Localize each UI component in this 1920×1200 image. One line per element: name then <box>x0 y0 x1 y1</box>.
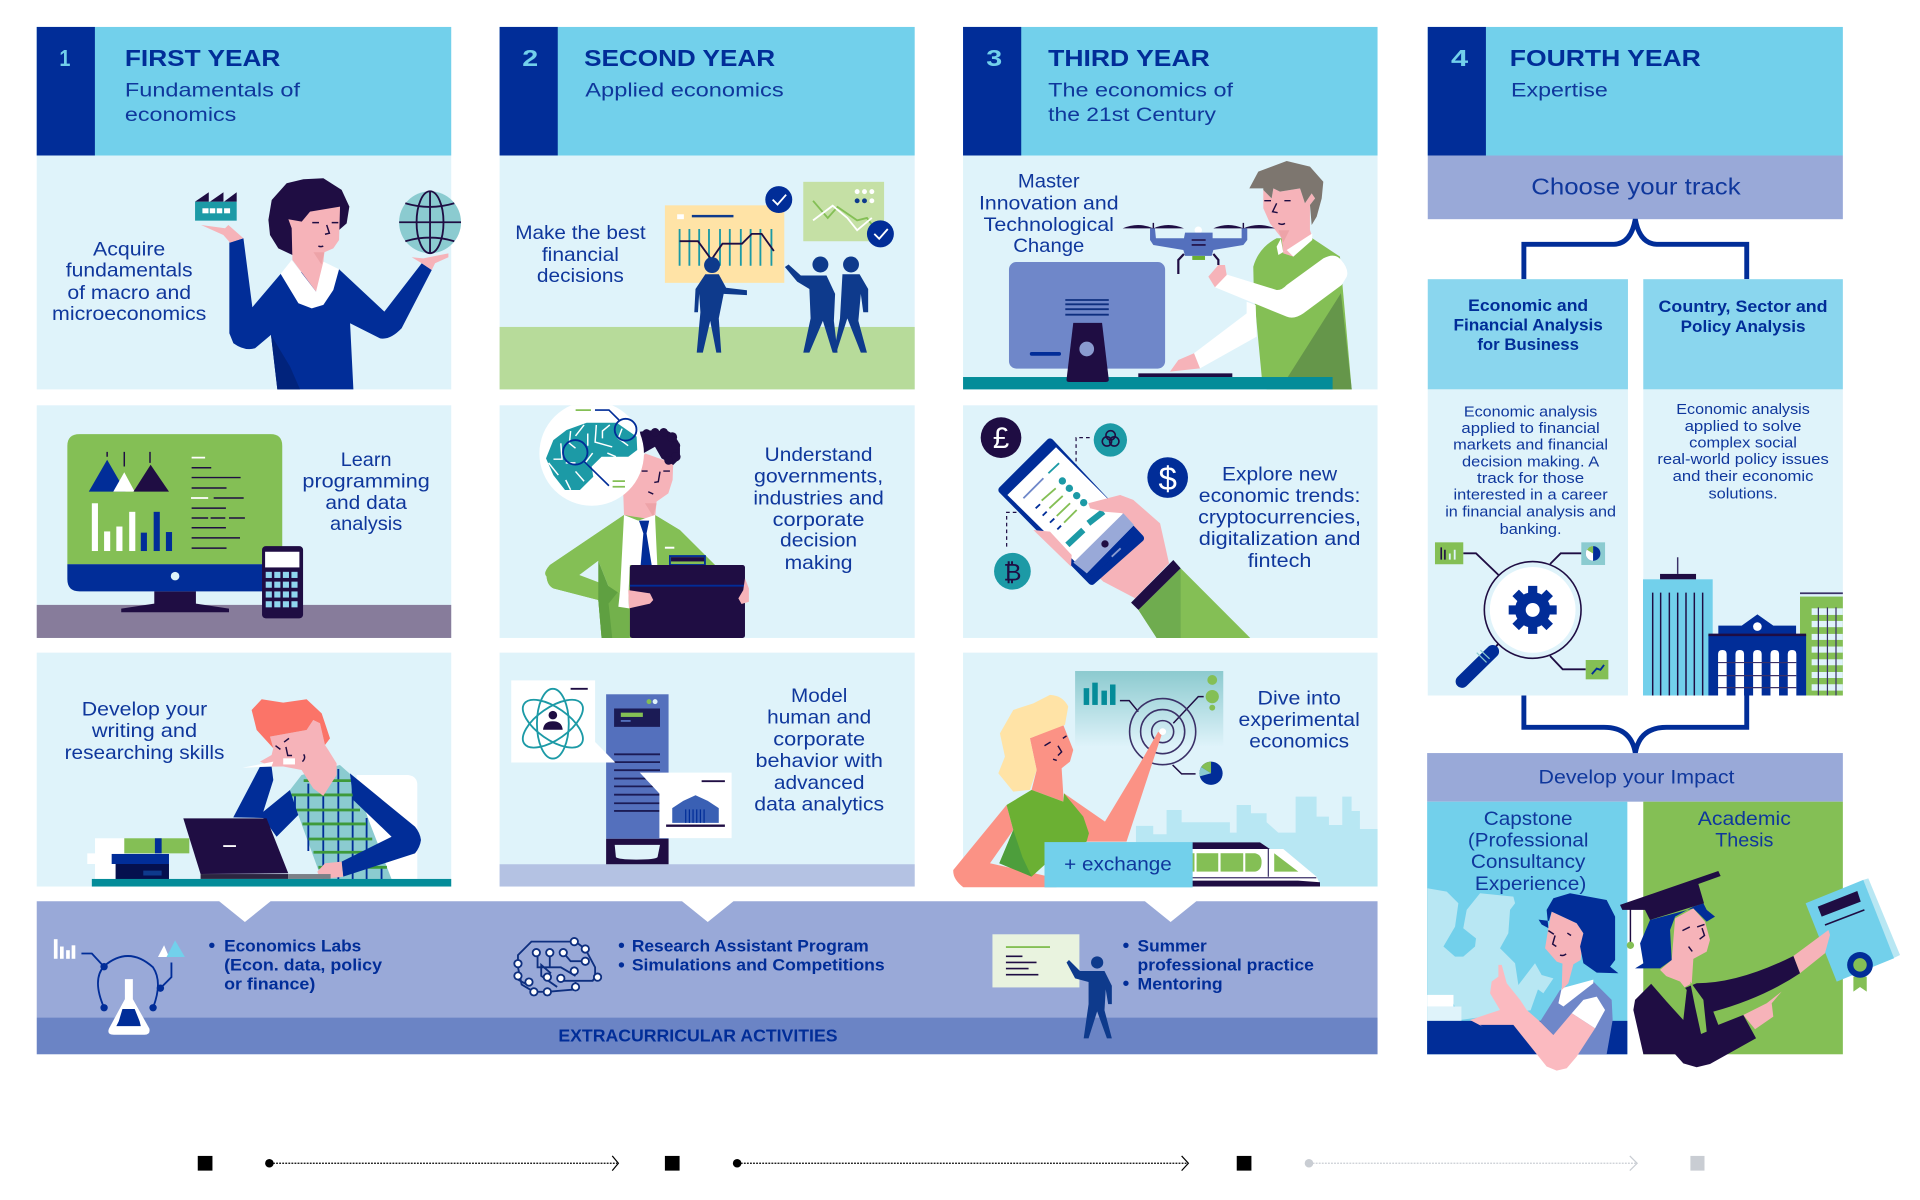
icon: chair <box>357 775 417 879</box>
choose your track <box>1428 156 1843 219</box>
header: first year: FIRST YEAR <box>125 45 281 71</box>
panel: master innovation: Technological <box>984 215 1114 236</box>
milestone square <box>665 1156 680 1171</box>
text: economics labs: Economics Labs <box>224 936 361 955</box>
panel: master innovation <box>963 156 1378 389</box>
icon: woman presenting <box>1470 893 1618 1071</box>
track card: business: Economic and <box>1468 296 1588 315</box>
track card: business: markets and financial <box>1453 437 1608 453</box>
panel: extracurricular activities: EXTRACURRICULAR ACTIVITIES <box>558 1025 838 1045</box>
panel: learn programming: and data <box>325 493 407 514</box>
panel: understand governments: corporate <box>773 510 864 531</box>
arrow: third grey dotted <box>1305 1156 1637 1171</box>
header: fourth year: FOURTH YEAR <box>1510 45 1701 71</box>
panel: understand governments: industries and <box>753 488 884 509</box>
icon: magnifier with gear <box>1435 542 1608 681</box>
panel: explore new trends: fintech <box>1248 551 1311 572</box>
panel: acquire fundamentals: of macro and <box>67 283 191 304</box>
panel: academic thesis: Thesis <box>1715 831 1773 852</box>
arrow: branching connector to tracks <box>1524 219 1747 279</box>
header: second year <box>500 27 915 156</box>
panel: understand governments <box>500 401 915 638</box>
timeline <box>198 1156 1704 1171</box>
panel: model behaviour: data analytics <box>754 795 884 816</box>
track card: policy: Policy Analysis <box>1681 317 1806 336</box>
icon: atom person bubble <box>511 680 615 762</box>
text: economics labs: or finance) <box>224 974 315 993</box>
track card: business: banking. <box>1500 522 1562 538</box>
panel: develop writing: Develop your <box>82 700 207 721</box>
icon: desktop monitor with charts <box>67 434 282 612</box>
panel: acquire fundamentals: Acquire <box>93 239 165 260</box>
track card: policy: Country, Sector and <box>1659 297 1828 316</box>
header: second year: SECOND YEAR <box>584 45 775 71</box>
panel: financial decisions: financial <box>542 245 619 266</box>
icon: city skyline <box>1136 797 1378 887</box>
panel: model behaviour <box>500 653 915 887</box>
panel: understand governments: governments, <box>754 466 883 487</box>
icon: man writing on laptop <box>233 699 421 879</box>
text: summer practice: Mentoring <box>1138 974 1223 993</box>
panel: develop writing <box>37 653 451 887</box>
panel: acquire fundamentals: fundamentals <box>66 261 193 282</box>
panel: develop writing: researching skills <box>65 743 224 764</box>
icon: presenter at board <box>992 934 1112 1038</box>
milestone square grey <box>1690 1156 1704 1171</box>
icon: bank bubble <box>640 773 732 838</box>
header: second year: 2 <box>522 45 538 71</box>
icon: target data screen <box>1075 671 1223 785</box>
header: fourth year: Expertise <box>1511 80 1608 102</box>
panel: develop writing: writing and <box>91 721 197 742</box>
panel: learn programming <box>37 405 451 638</box>
track card: business: for Business <box>1477 335 1579 354</box>
desk <box>963 377 1333 389</box>
header: first year <box>37 27 451 156</box>
icon: man with briefcase <box>545 428 749 638</box>
panel: financial decisions <box>500 156 915 389</box>
text: summer practice: professional practice <box>1138 955 1314 974</box>
text: summer practice: Summer <box>1138 936 1207 955</box>
icon: check badges <box>765 186 894 247</box>
header: fourth year: 4 <box>1451 45 1468 71</box>
text: economics labs <box>209 936 383 993</box>
track card: policy: and their economic <box>1673 469 1813 485</box>
arrow: first dotted <box>265 1156 618 1171</box>
milestone square <box>198 1156 212 1171</box>
icon: server tower <box>606 694 669 864</box>
icon: city buildings <box>1643 557 1843 696</box>
track card: business: Financial Analysis <box>1453 316 1603 335</box>
panel: academic thesis: Academic <box>1698 809 1791 830</box>
milestone square <box>1237 1156 1251 1171</box>
text: summer practice <box>1123 936 1314 993</box>
panel: extracurricular activities <box>37 901 1378 1054</box>
icon: hand holding smartphone <box>1002 442 1250 638</box>
icon: currency badges: ₿ <box>1003 559 1021 586</box>
choose your track: Choose your track <box>1531 174 1741 200</box>
icon: background silhouettes and desk <box>1427 888 1627 1054</box>
track card: policy: complex social <box>1689 436 1797 452</box>
arrow: merging connector to impact <box>1524 696 1747 753</box>
track card: policy: Economic analysis <box>1676 402 1810 418</box>
panel: model behaviour: behavior with <box>756 751 883 772</box>
track card: business: applied to financial <box>1461 421 1600 437</box>
panel: explore new trends: economic trends: <box>1199 486 1360 507</box>
panel: explore new trends: digitalization and <box>1199 529 1360 550</box>
panel: model behaviour: human and <box>767 708 871 729</box>
track card: business: Economic analysis <box>1464 404 1597 420</box>
track card: policy: applied to solve <box>1685 419 1802 435</box>
panel: model behaviour: Model <box>791 686 847 707</box>
track card: business: in financial analysis and <box>1445 505 1616 521</box>
panel: capstone: Consultancy <box>1471 852 1586 873</box>
panel: experimental economics: Dive into <box>1258 689 1341 710</box>
icon: calculator <box>262 546 303 618</box>
track card: business: track for those <box>1477 471 1584 487</box>
track card: policy: solutions. <box>1708 486 1778 502</box>
panel: understand governments: decision <box>780 531 857 552</box>
icon: currency badges <box>981 417 1188 590</box>
icon: woman pointing at target <box>953 695 1166 887</box>
label: plus exchange: + exchange <box>1064 855 1172 876</box>
panel: capstone <box>1427 802 1627 1071</box>
panel: capstone: Experience) <box>1475 874 1586 895</box>
panel: experimental economics <box>953 653 1378 887</box>
header: third year: 3 <box>986 45 1002 71</box>
header: first year: 1 <box>59 45 70 71</box>
panel: explore new trends <box>963 405 1378 638</box>
track card: business: decision making. A <box>1462 455 1600 471</box>
icon: three silhouettes <box>694 257 868 353</box>
text: research <box>619 936 885 974</box>
panel: learn programming: programming <box>302 471 430 492</box>
icon: lab flask <box>54 939 185 1035</box>
panel: understand governments: Understand <box>765 445 872 466</box>
track card: business <box>1428 279 1628 696</box>
icon: currency badges: £ <box>993 422 1009 455</box>
arrow: second dotted <box>733 1156 1188 1171</box>
panel: financial decisions: Make the best <box>515 223 646 244</box>
icon: thought bubble with brain <box>539 401 644 506</box>
panel: financial decisions: decisions <box>537 266 624 287</box>
panel: acquire fundamentals <box>37 156 461 389</box>
icon: stack of books <box>87 838 189 880</box>
text: research: Research Assistant Program <box>632 936 869 955</box>
panel: master innovation: Change <box>1013 236 1084 257</box>
icon: diploma with seal <box>1806 878 1900 992</box>
text: research: Simulations and Competitions <box>632 955 885 974</box>
icon: woman holding factory and globe <box>195 178 461 389</box>
icon: graduate pointing <box>1620 871 1830 1067</box>
header: second year: Applied economics <box>585 80 784 102</box>
icon: computer monitor <box>1009 262 1165 369</box>
panel: model behaviour: corporate <box>773 730 865 751</box>
chart board: green <box>803 182 884 241</box>
track card: policy <box>1643 279 1843 696</box>
icon: train <box>1191 842 1320 887</box>
label: plus exchange <box>1044 842 1193 887</box>
icon: monitor stand and keyboard <box>1067 323 1232 382</box>
icon: man flying a drone <box>1123 161 1352 389</box>
track card: policy: real-world policy issues <box>1657 452 1829 468</box>
header: third year <box>963 27 1378 156</box>
panel: experimental economics: experimental <box>1239 710 1360 731</box>
track card: business: interested in a career <box>1453 488 1608 504</box>
header: third year: the 21st Century <box>1048 104 1216 126</box>
icon: circuit brain <box>514 938 601 996</box>
icon: currency badges: $ <box>1158 461 1177 498</box>
chart board: yellow <box>665 205 784 283</box>
panel: explore new trends: cryptocurrencies, <box>1198 507 1361 528</box>
desk <box>92 879 451 887</box>
header: first year: economics <box>125 104 237 126</box>
panel: understand governments: making <box>785 553 853 574</box>
panel: model behaviour: advanced <box>774 773 864 794</box>
header: third year: The economics of <box>1048 80 1234 102</box>
panel: master innovation: Innovation and <box>979 193 1119 214</box>
header: first year: Fundamentals of <box>125 80 301 102</box>
header: third year: THIRD YEAR <box>1048 45 1210 71</box>
develop your impact <box>1427 753 1843 802</box>
panel: experimental economics: economics <box>1249 732 1349 753</box>
panel: acquire fundamentals: microeconomics <box>52 304 206 325</box>
panel: academic thesis <box>1620 802 1900 1067</box>
panel: learn programming: analysis <box>330 514 402 535</box>
text: economics labs: (Econ. data, policy <box>224 955 383 974</box>
panel: explore new trends: Explore new <box>1222 465 1337 486</box>
icon: laptop <box>183 818 331 879</box>
panel: capstone: (Professional <box>1468 831 1588 852</box>
header: fourth year <box>1428 27 1843 156</box>
panel: capstone: Capstone <box>1484 809 1573 830</box>
panel: learn programming: Learn <box>341 450 392 471</box>
panel: master innovation: Master <box>1018 171 1080 192</box>
develop your impact: Develop your Impact <box>1539 767 1735 789</box>
